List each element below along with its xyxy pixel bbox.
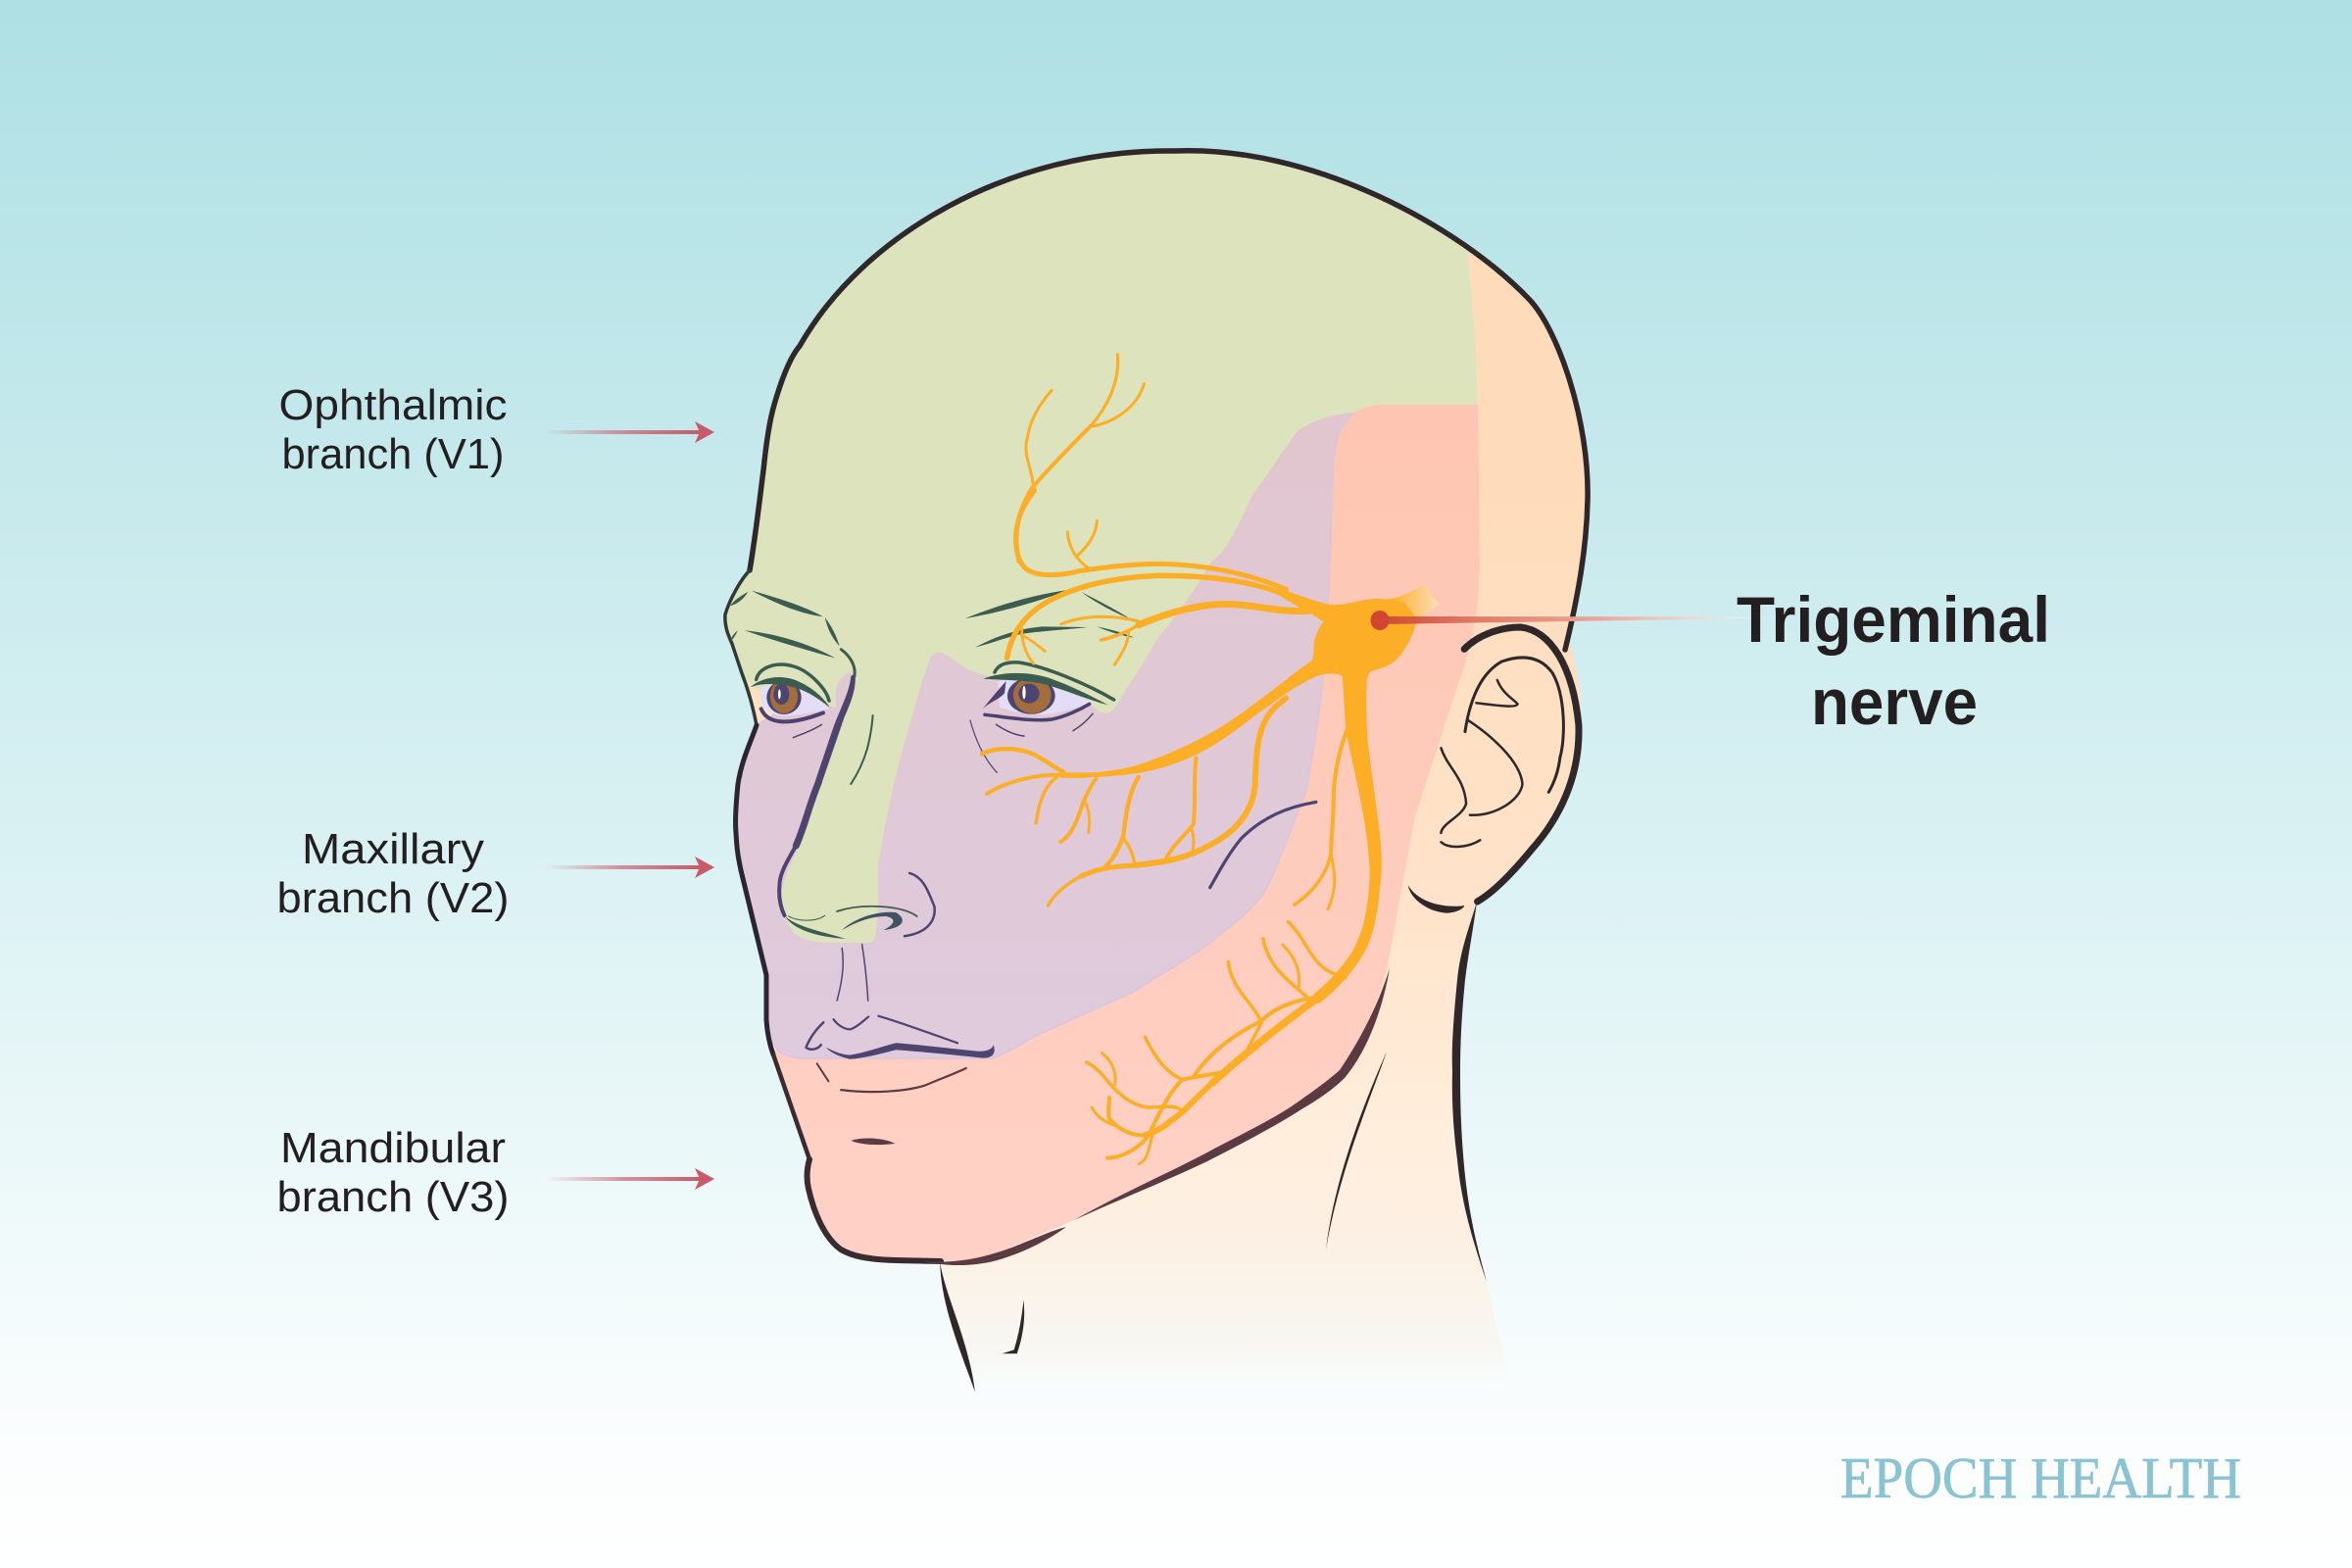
- label: mandibular branch: Mandibular: [280, 1124, 506, 1172]
- outline: neck right: [1452, 902, 1487, 1282]
- right eye: [970, 662, 1114, 772]
- skin base: head, ear and neck: [725, 151, 1588, 1396]
- region: ophthalmic V1: [725, 151, 1478, 943]
- left eye: [750, 664, 830, 738]
- neck left line: [940, 1262, 975, 1392]
- ear lobe shadow: [1408, 885, 1464, 913]
- nose side creases: [841, 650, 873, 784]
- pointer line to ganglion: [1382, 616, 1779, 624]
- ear strokes: [1441, 627, 1579, 902]
- region: mandibular V3: [773, 405, 1480, 1261]
- arrow: ophthalmic: [546, 421, 714, 443]
- label: ophthalmic branch: branch (V1): [282, 430, 504, 478]
- ear: [1408, 627, 1579, 913]
- arrow: maxillary: [546, 857, 714, 878]
- head illustration: [276, 151, 2241, 1510]
- outline: cheek edge: [736, 725, 773, 1054]
- label: maxillary branch: [276, 825, 510, 922]
- nerve: ganglion and central trunks: [1078, 585, 1440, 980]
- nose bridge line: [815, 673, 856, 781]
- nose tip and nostril: [779, 781, 935, 1001]
- outline: jaw underside: [921, 1227, 1066, 1265]
- label: mandibular branch: branch (V3): [276, 1173, 510, 1221]
- nerve: ophthalmic forehead branches: [1016, 355, 1144, 562]
- mouth: [806, 1016, 995, 1145]
- label: mandibular branch: [276, 1124, 510, 1221]
- outline: cranium: [750, 151, 1588, 650]
- nerve: mandibular trunk and branches: [1087, 833, 1376, 1164]
- logo: Epoch Health: EPOCH HEALTH: [1840, 1446, 2241, 1510]
- outline: jaw line: [1074, 968, 1390, 1220]
- trigeminal nerve: [982, 355, 1440, 1164]
- title: trigeminal nerve: nerve: [1811, 665, 1978, 738]
- neck crease right: [1326, 1052, 1387, 1250]
- head outline: [725, 151, 1588, 1261]
- cheek line: [1210, 802, 1316, 888]
- region: maxillary V2: [736, 412, 1353, 1058]
- chin mark: [851, 1138, 895, 1145]
- outline: chin edge: [773, 1054, 809, 1159]
- face features: [730, 590, 1134, 784]
- title: trigeminal nerve: [1737, 583, 2050, 738]
- label: maxillary branch: branch (V2): [276, 874, 510, 922]
- label: ophthalmic branch: Ophthalmic: [278, 381, 508, 429]
- nerve: branches in the upper face: [982, 490, 1347, 909]
- title: trigeminal nerve: Trigeminal: [1737, 583, 2050, 656]
- arrow: mandibular: [546, 1168, 714, 1190]
- left brow lines: [730, 591, 840, 659]
- ganglion marker dot: [1370, 611, 1390, 630]
- label: maxillary branch: Maxillary: [302, 825, 484, 873]
- label: ophthalmic branch: [278, 381, 508, 478]
- lower face features: [779, 781, 1024, 1392]
- neck crease left: [1002, 1299, 1024, 1353]
- right brow lines: [965, 590, 1134, 648]
- outline: brow and forehead edge: [725, 570, 757, 725]
